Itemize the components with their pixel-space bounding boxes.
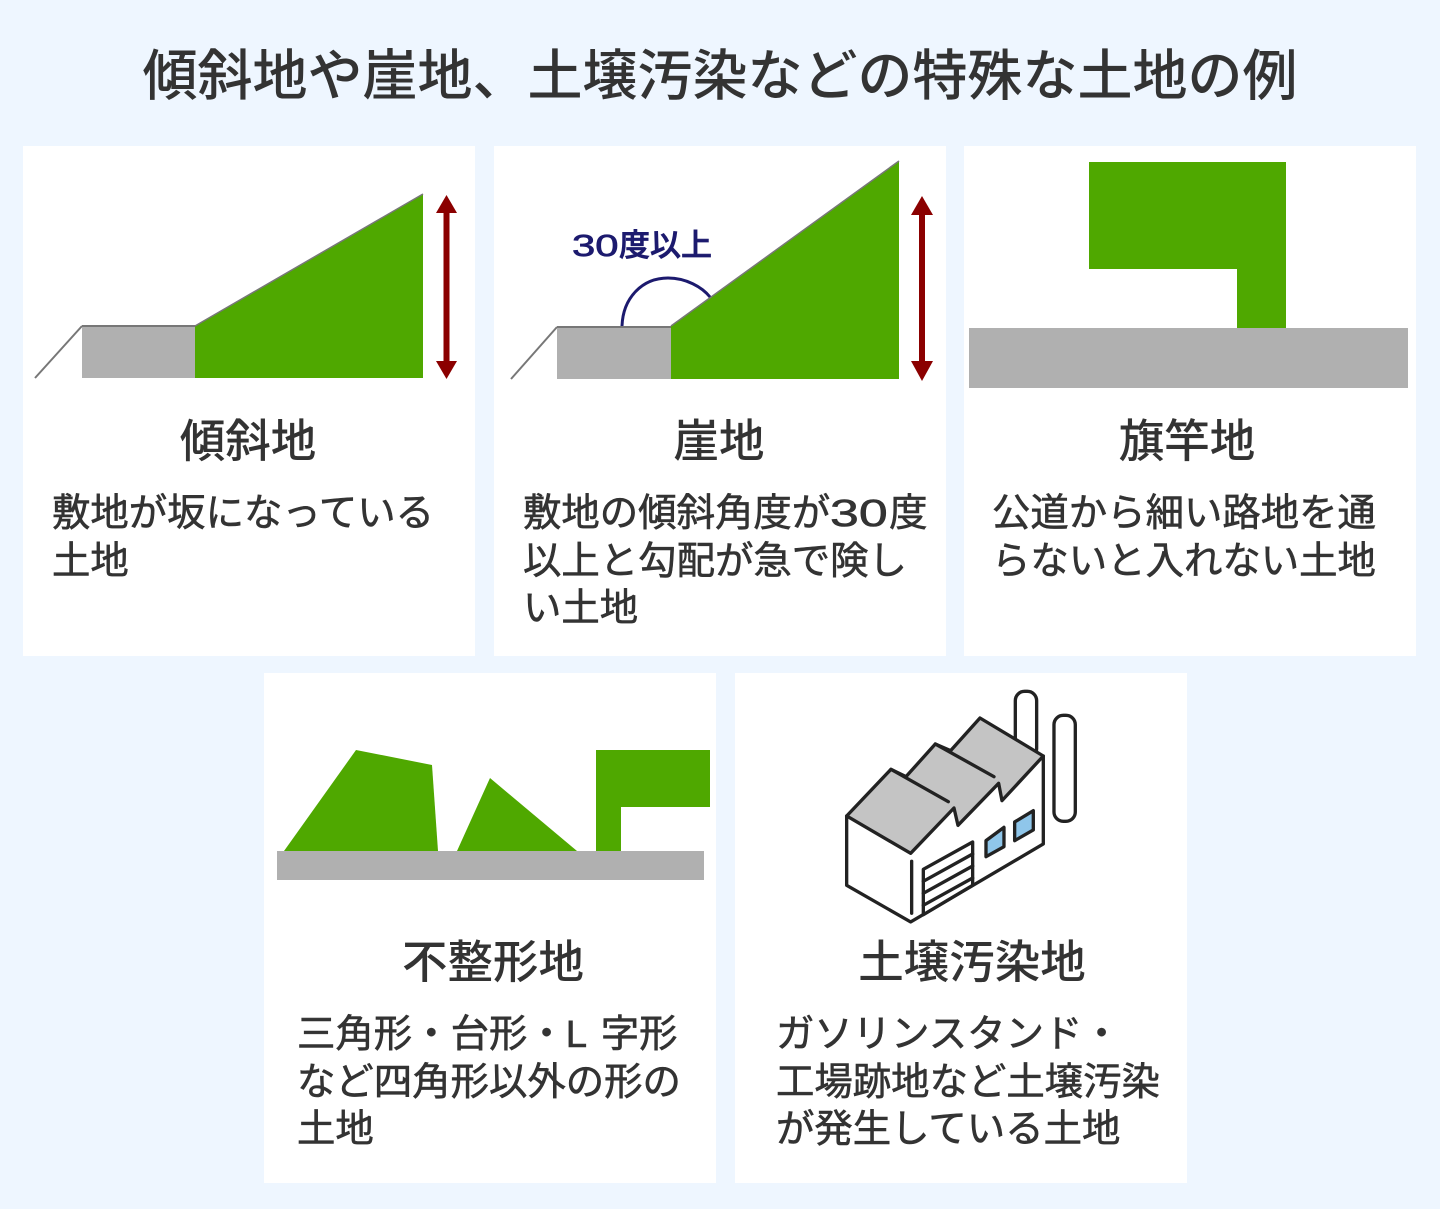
panel: flag-shaped land — [964, 146, 1416, 656]
text: slope land description: 土地 — [52, 540, 129, 582]
label: 30 degrees or more: 度以上 — [619, 228, 712, 263]
text: cliff land description: 敷地の傾斜角度が 度 — [523, 492, 928, 535]
text: cliff land description — [523, 492, 928, 630]
text: slope land description: 敷地が坂になっている — [52, 492, 434, 535]
title: 傾斜地や崖地、土壌汚染などの特殊な土地の例 — [142, 45, 1298, 107]
diagram: irregular plots — [277, 750, 710, 880]
text: slope land description — [52, 492, 434, 582]
text: cliff land description: 以上と勾配が急で険し — [523, 540, 907, 582]
panel: contaminated land — [735, 673, 1187, 1183]
diagram: slope — [34, 193, 457, 379]
text: cliff land description: 30 — [830, 492, 888, 535]
diagram: cliff — [510, 160, 933, 381]
icon: factory — [844, 690, 1077, 924]
heading: slope land: 傾斜地 — [180, 416, 316, 467]
text: flag-shaped land description — [992, 492, 1376, 582]
text: irregular land description: 三角形・台形・L 字形 — [297, 1013, 678, 1056]
text: contaminated land description: ガソリンスタンド・ — [776, 1013, 1121, 1056]
label: 30 degrees or more — [572, 228, 712, 263]
panel: irregular land — [264, 673, 716, 1183]
text: irregular land description — [297, 1013, 681, 1151]
text: contaminated land description: が発生している土地 — [776, 1108, 1120, 1151]
text: contaminated land description — [776, 1013, 1160, 1151]
text: cliff land description: い土地 — [523, 587, 638, 630]
heading: cliff land: 崖地 — [673, 416, 764, 467]
text: irregular land description: 土地 — [297, 1108, 374, 1151]
heading: flag-shaped land: 旗竿地 — [1119, 416, 1255, 467]
heading: contaminated land: 土壌汚染地 — [858, 937, 1086, 988]
panel: cliff land — [494, 146, 946, 656]
diagram: flag lot — [969, 162, 1408, 388]
text: contaminated land description: 工場跡地など土壌汚染 — [776, 1060, 1160, 1104]
text: flag-shaped land description: らないと入れない土地 — [992, 540, 1376, 582]
text: flag-shaped land description: 公道から細い路地を通 — [992, 492, 1376, 535]
panel: slope land — [23, 146, 475, 656]
text: irregular land description: など四角形以外の形の — [297, 1060, 681, 1104]
heading: irregular land: 不整形地 — [402, 937, 584, 988]
label: 30 degrees or more: 30 — [572, 228, 619, 263]
